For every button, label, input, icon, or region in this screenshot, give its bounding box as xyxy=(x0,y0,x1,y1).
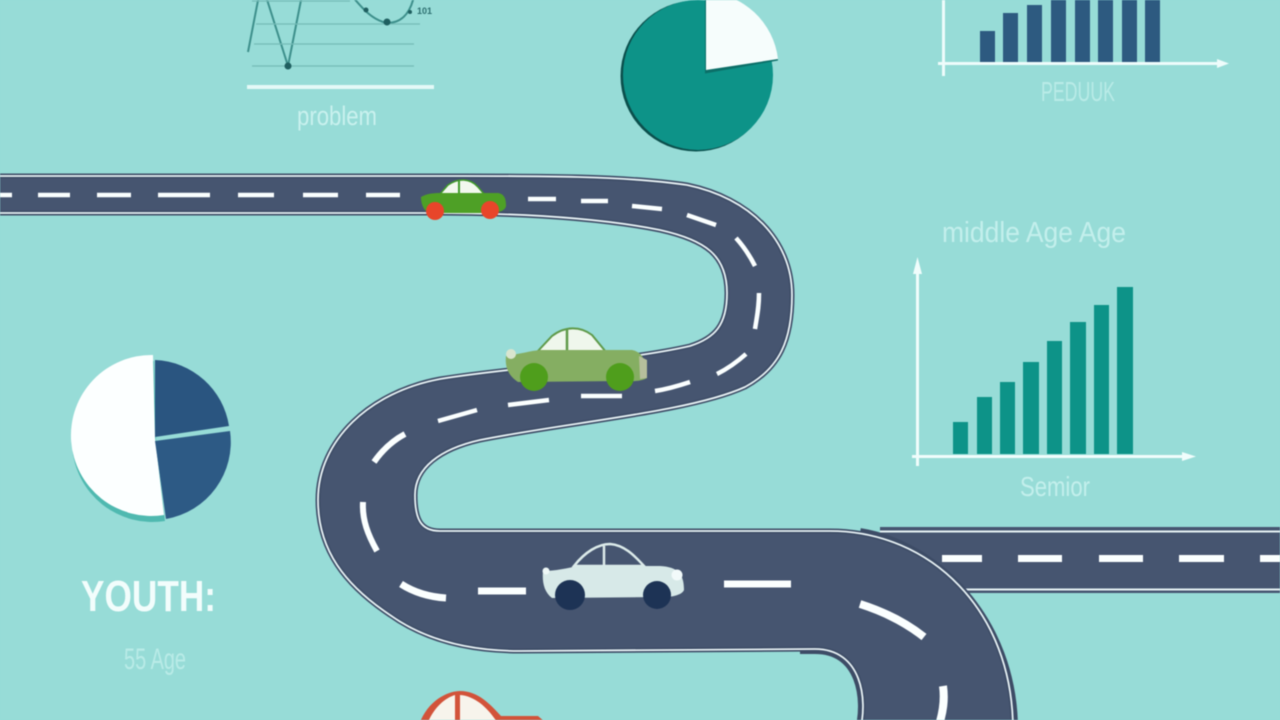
chart label: senior: Semior xyxy=(1020,471,1090,502)
bar chart: middle right xyxy=(912,257,1196,466)
label: age under youth: 55 Age xyxy=(124,643,186,676)
chart label: pedulk: PEDUUK xyxy=(1041,76,1115,107)
chart label: problem: problem xyxy=(297,101,377,131)
heading: youth: YOUTH: xyxy=(81,572,216,621)
car: white silver xyxy=(542,544,684,610)
line chart: top left: 101 xyxy=(417,6,432,16)
car: red, cropped at bottom xyxy=(420,691,545,720)
bar chart: top right xyxy=(938,0,1229,76)
line chart: top left xyxy=(247,0,434,89)
road: right branch xyxy=(880,527,1280,593)
road: winding main road xyxy=(0,176,1013,720)
chart heading: middle age: middle Age Age xyxy=(942,217,1126,249)
pie chart: left xyxy=(71,355,231,522)
road centre dashes xyxy=(0,195,944,720)
car: large green xyxy=(506,328,647,391)
pie chart: top centre xyxy=(620,0,778,152)
car: small green with red wheels xyxy=(421,180,506,220)
